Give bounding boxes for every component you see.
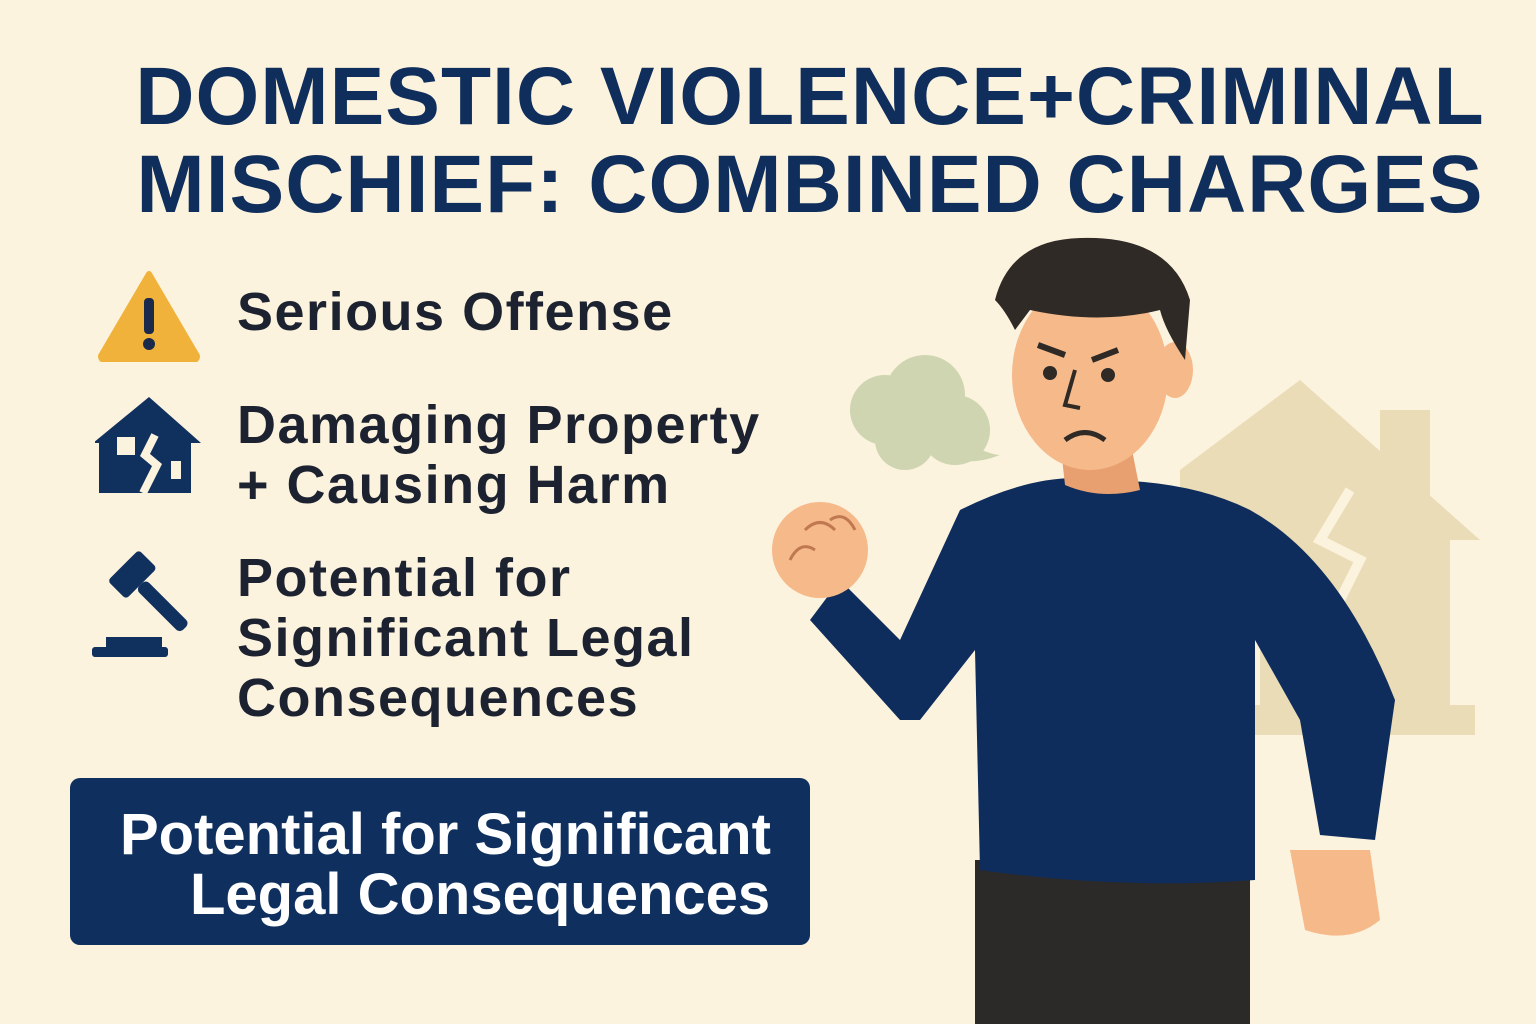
item: damaging property: Damaging Property [237, 395, 761, 455]
item: serious offense: Serious Offense [237, 282, 674, 342]
item: damaging property: + Causing Harm [237, 455, 671, 515]
illustration: house, cloud, angry man [772, 238, 1480, 1024]
fists [772, 502, 868, 598]
house background [1180, 380, 1480, 735]
icon: damaged house [95, 397, 201, 493]
icon: gavel [92, 551, 188, 657]
pants [975, 860, 1250, 1024]
body [810, 478, 1395, 883]
callout box: Potential for Significant [120, 802, 771, 867]
title: DOMESTIC VIOLENCE+CRIMINAL [135, 51, 1485, 142]
item: legal consequences: Significant Legal [237, 608, 695, 668]
icon: warning [98, 271, 200, 362]
item: serious offense [98, 271, 674, 362]
item: damaging property [95, 395, 761, 515]
head [1012, 280, 1168, 470]
neck [1060, 440, 1140, 494]
cloud [850, 355, 1000, 470]
title [135, 51, 1485, 230]
item: legal consequences: Potential for [237, 548, 572, 608]
callout box [70, 778, 810, 945]
item: legal consequences [92, 548, 695, 728]
item: legal consequences: Consequences [237, 668, 639, 728]
title: MISCHIEF: COMBINED CHARGES [136, 139, 1484, 230]
callout box: Legal Consequences [190, 862, 770, 927]
